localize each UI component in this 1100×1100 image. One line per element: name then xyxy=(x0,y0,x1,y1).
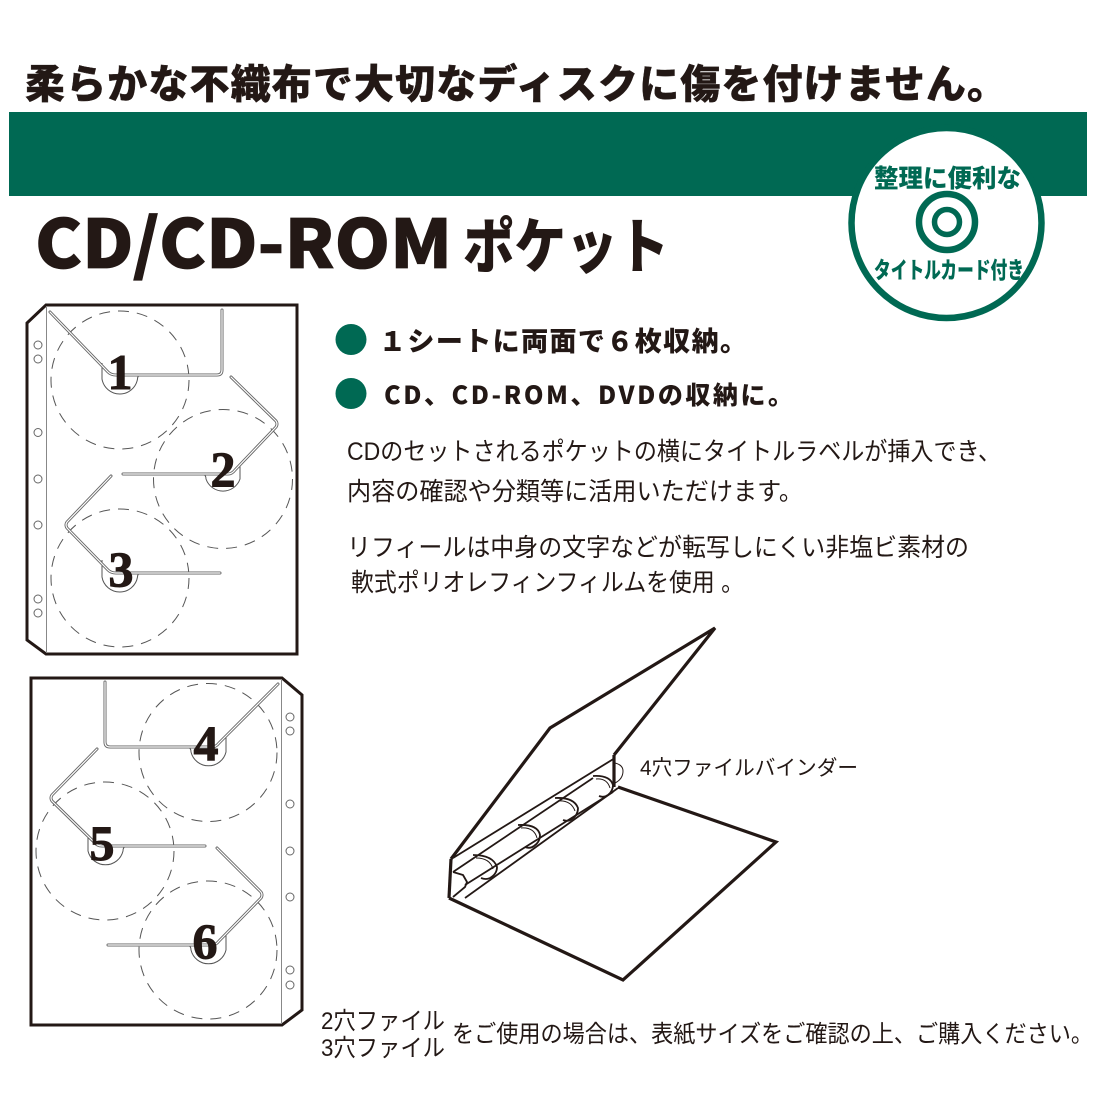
pocket 5 xyxy=(51,749,205,871)
pocket 1 xyxy=(50,310,222,400)
pocket 3: 3 xyxy=(108,541,134,597)
illustration: 4-hole ring binder xyxy=(449,628,776,980)
ring mechanism rails xyxy=(453,758,623,898)
bullet 2: CD、CD-ROM、DVDの収納に。 xyxy=(384,376,793,412)
rings xyxy=(473,776,613,879)
text block: material description: 軟式ポリオレフィンフィルムを使用 。 xyxy=(351,569,744,597)
pocket 2: 2 xyxy=(210,441,236,497)
label: binder type: 4穴ファイルバインダー xyxy=(640,757,858,780)
text block: title label description: 内容の確認や分類等に活用いただけます。 xyxy=(347,478,803,506)
binding holes xyxy=(286,713,294,989)
disc outlines dashed xyxy=(51,311,292,647)
spine xyxy=(449,859,451,898)
heading: product name xyxy=(35,191,669,288)
badge: title card disc xyxy=(852,128,1042,318)
text block: file type note: 3穴ファイル xyxy=(321,1035,445,1062)
text block: title label description: CDのセットされるポケットの横にタイトルラベルが挿入でき、 xyxy=(347,438,1001,466)
pocket 4: 4 xyxy=(194,715,218,771)
badge text: top: 整理に便利な xyxy=(874,159,1021,195)
panel: refill sheet back, pockets 4-6 xyxy=(31,678,302,1025)
icon: disc centre rings xyxy=(919,194,975,250)
text block: file type note: 2穴ファイル xyxy=(321,1008,445,1035)
pocket 2 xyxy=(123,377,277,497)
disc outlines dashed xyxy=(36,684,277,1019)
green header band xyxy=(9,112,1087,196)
back cover xyxy=(451,628,715,859)
heading: product name: ポケット xyxy=(463,199,669,286)
pocket 6: 6 xyxy=(192,913,218,969)
bullet 1: １シートに両面で６枚収納。 xyxy=(379,320,747,359)
panel: refill sheet front, pockets 1-3 xyxy=(27,305,297,654)
pocket 1: 1 xyxy=(108,344,132,400)
binding holes xyxy=(34,341,42,617)
text block: file type note xyxy=(321,1008,1093,1062)
badge text: bottom: タイトルカード付き xyxy=(874,251,1024,285)
pocket 4 xyxy=(105,682,278,771)
text block: title label description xyxy=(347,438,1001,506)
title: main heading: 柔らかな不織布で大切なディスクに傷を付けません。 xyxy=(25,52,1007,110)
pocket 5: 5 xyxy=(90,815,114,871)
front cover xyxy=(449,787,776,980)
text block: material description xyxy=(347,534,969,597)
heading: product name: CD/CD-ROM xyxy=(35,191,452,288)
text block: material description: リフィールは中身の文字などが転写しにくい非塩ビ素材の xyxy=(347,534,969,562)
pocket 3 xyxy=(66,476,220,597)
pocket 6 xyxy=(108,848,262,969)
